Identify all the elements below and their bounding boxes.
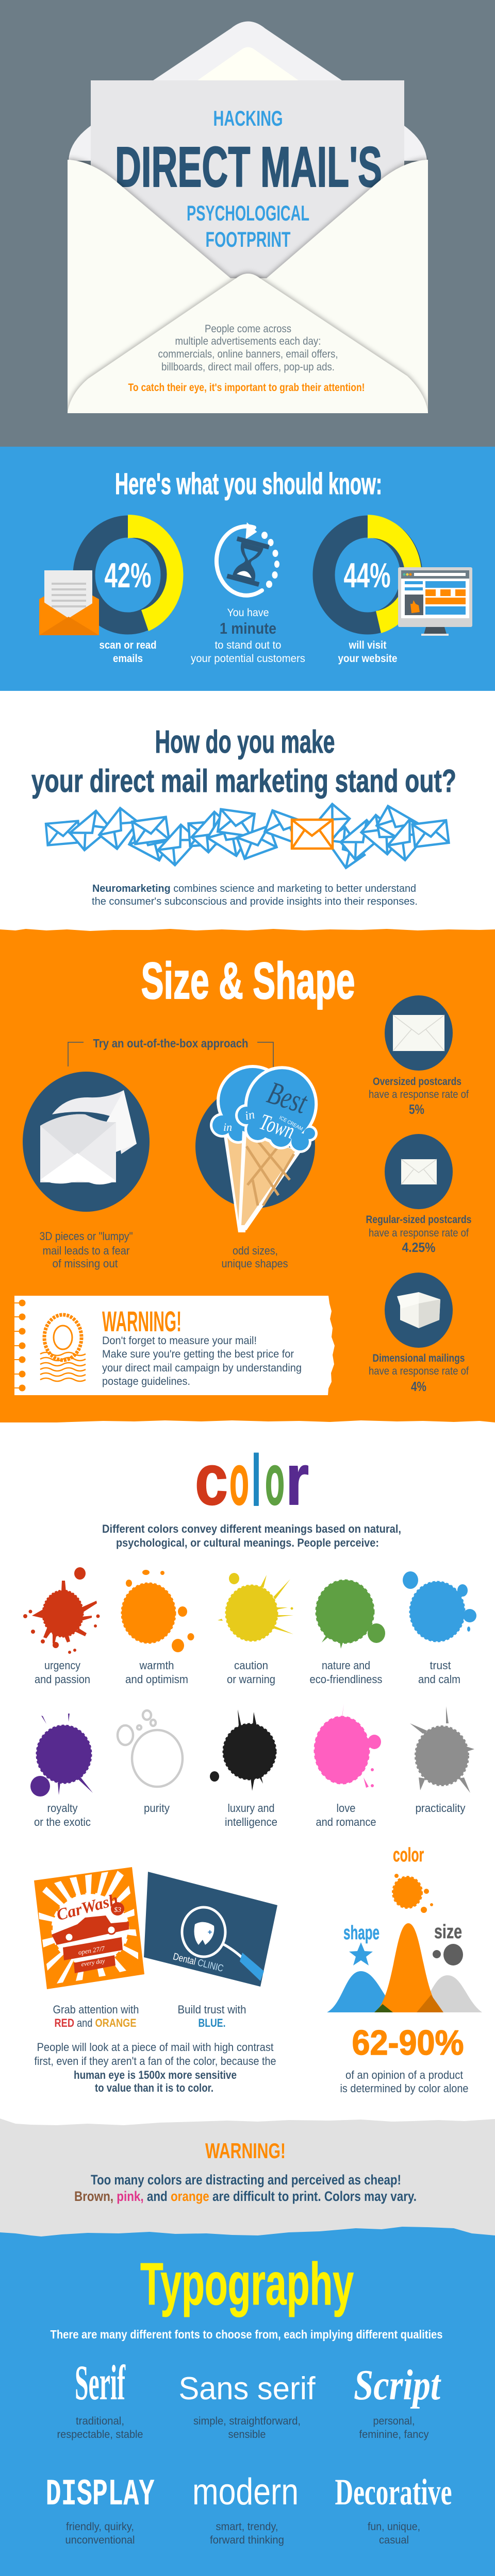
stat: 62-90 percent: [340, 2023, 468, 2095]
panel: stand out: [31, 724, 456, 907]
label: love: and romance: [316, 1816, 376, 1828]
label: scan or read emails: scan or read: [99, 639, 157, 651]
heading: How do you make: [155, 724, 335, 760]
label: warmth: [125, 1659, 188, 1686]
callout: measure your mail warning: Don't forget to measure your mail!: [102, 1335, 257, 1347]
label: odd sizes: unique shapes: [222, 1257, 288, 1270]
bracket and approach label: [68, 1037, 273, 1067]
heading: c: [195, 1439, 228, 1520]
font sample: serif: Serif: [75, 2355, 126, 2410]
label: scan or read emails: [99, 639, 157, 665]
label: warmth: warmth: [139, 1659, 174, 1672]
car wash mailer: $3: [114, 1906, 121, 1914]
font sample: script: personal,: [373, 2415, 415, 2427]
text: grab attention: [53, 2003, 139, 2029]
stat: 62-90 percent: is determined by color alone: [340, 2082, 468, 2095]
label: will visit your website: [338, 639, 397, 665]
heading: l: [252, 1440, 261, 1521]
back cone: B: [244, 1091, 259, 1118]
donut: 42 percent: 42%: [104, 556, 152, 595]
label: odd sizes: odd sizes,: [233, 1244, 278, 1257]
intro text: [102, 1522, 401, 1549]
panel: what you should know: [39, 467, 472, 665]
callout: measure your mail warning: postage guidelines.: [102, 1376, 190, 1387]
title: PSYCHOLOGICAL: [187, 201, 309, 225]
star: [349, 1942, 373, 1965]
label: caution: caution: [234, 1659, 268, 1672]
heading: o: [265, 1439, 285, 1520]
text: oversized postcards rate: [369, 1076, 469, 1117]
neuromarketing text: [92, 883, 418, 907]
panel: color: [23, 1439, 482, 2095]
font sample: serif: traditional,: [76, 2415, 124, 2427]
intro text: multiple advertisements each day:: [175, 335, 321, 347]
callout: measure your mail warning: your direct mail campaign by understanding: [102, 1362, 302, 1374]
envelope back flap: [69, 22, 427, 161]
splat: red: [23, 1567, 100, 1654]
heading: r: [286, 1439, 309, 1520]
oval: ice cream cone mailer: [195, 1059, 325, 1232]
bell curve chart: color: [393, 1844, 424, 1866]
neuromarketing text: the consumer's subconscious and provide insights into their responses.: [92, 896, 418, 907]
text: contrast: to value than it is to color.: [95, 2081, 213, 2094]
label: urgency: urgency: [44, 1659, 80, 1672]
text: contrast: [34, 2041, 276, 2094]
font sample: modern: modern: [192, 2471, 299, 2513]
car wash mailer: CarWash: [55, 1890, 120, 1924]
label: practicality: practicality: [416, 1802, 465, 1815]
dental clinic mailer: [144, 1872, 277, 1987]
icon: hourglass timer: [217, 524, 279, 596]
label: love: love: [336, 1802, 356, 1815]
font sample: sans serif: sensible: [228, 2429, 266, 2441]
label: warmth: and optimism: [125, 1673, 188, 1686]
text: contrast: human eye is 1500x more sensitive: [74, 2069, 237, 2081]
envelope front: [68, 160, 428, 413]
one minute text: You have: [227, 607, 269, 619]
font sample: sans serif: simple, straightforward,: [193, 2415, 301, 2427]
font sample: script: [354, 2361, 441, 2441]
bell curve chart: shape: [343, 1922, 380, 1944]
label: urgency: and passion: [35, 1673, 90, 1686]
text: contrast: People will look at a piece of mail with high contrast: [37, 2041, 273, 2054]
text: contrast: first, even if they aren't a fan of the color, because the: [34, 2055, 276, 2067]
label: will visit your website: your website: [338, 653, 397, 665]
font sample: sans serif: [178, 2371, 316, 2441]
label: urgency: [35, 1659, 90, 1686]
font sample: display: DISPLAY: [45, 2473, 155, 2516]
one minute text: your potential customers: [191, 653, 305, 665]
label: 3D pieces: 3D pieces or "lumpy": [39, 1230, 133, 1243]
text: grab attention: Grab attention with: [53, 2003, 139, 2016]
front cone: ICE CREAM: [278, 1115, 304, 1132]
splat: white outline: [118, 1710, 183, 1787]
envelope strip: [46, 804, 449, 868]
label: scan or read emails: emails: [113, 653, 143, 665]
text: build trust: [177, 2003, 246, 2029]
intro text: billboards, direct mail offers, pop-up ads.: [161, 361, 335, 373]
text: dimensional mailings rate: Dimensional mailings: [372, 1352, 465, 1364]
font sample: script: Script: [354, 2361, 441, 2409]
intro text: commercials, online banners, email offers,: [158, 348, 338, 360]
icon: orange envelope with letter: [39, 570, 99, 635]
font sample: serif: respectable, stable: [57, 2429, 143, 2441]
label: luxury: luxury and: [228, 1802, 274, 1815]
text: regular postcards rate: Regular-sized postcards: [366, 1214, 471, 1226]
car wash mailer: [34, 1867, 144, 1989]
intro text: [128, 323, 365, 394]
text: dimensional mailings rate: have a response rate of: [369, 1365, 469, 1377]
car wash mailer: open 27/7: [78, 1944, 105, 1956]
label: trust: [418, 1659, 460, 1686]
heading: o: [229, 1439, 249, 1520]
title: FOOTPRINT: [205, 227, 291, 251]
heading: Typography: [140, 2250, 354, 2317]
label: royalty: or the exotic: [34, 1816, 91, 1828]
label: nature: nature and: [322, 1659, 370, 1672]
text: oversized postcards rate: Oversized postcards: [373, 1076, 461, 1088]
label: nature: [309, 1659, 383, 1686]
front cone: in: [244, 1108, 256, 1123]
text: dimensional mailings rate: 4%: [411, 1379, 426, 1394]
text: build trust: BLUE.: [198, 2016, 226, 2029]
panel: typography: [45, 2250, 452, 2576]
callout: color warning: [74, 2139, 417, 2204]
letter sheet: [91, 80, 404, 286]
dental clinic mailer: Dental CLINIC: [172, 1951, 224, 1974]
label: nature: eco-friendliness: [309, 1673, 383, 1686]
text: oversized postcards rate: have a response rate of: [369, 1089, 469, 1100]
text: regular postcards rate: [366, 1214, 471, 1255]
font sample: decorative: [335, 2471, 452, 2546]
label: caution: or warning: [227, 1673, 275, 1686]
back cone: [210, 1065, 289, 1232]
text: dimensional mailings rate: [369, 1352, 469, 1394]
label: 3D pieces: of missing out: [53, 1257, 118, 1270]
splat: gray: [410, 1706, 474, 1793]
stat: 62-90 percent: 62-90%: [352, 2023, 464, 2062]
icon: postage stamp: [40, 1315, 86, 1381]
intro text: People come across: [205, 323, 291, 335]
callout: color warning: WARNING!: [205, 2139, 286, 2163]
splat: pink: [315, 1704, 381, 1788]
bracket and approach label: Try an out-of-the-box approach: [93, 1037, 249, 1050]
heading: Size & Shape: [141, 952, 355, 1010]
oval: dimensional mailings: [385, 1273, 453, 1348]
splat: [393, 1874, 433, 1913]
font sample: modern: smart, trendy,: [216, 2521, 278, 2533]
text: build trust: Build trust with: [177, 2003, 246, 2016]
oval: lumpy mail: [23, 1072, 150, 1212]
splat: orange: [122, 1570, 194, 1652]
front cone: [235, 1059, 325, 1230]
heading: [31, 724, 456, 799]
donut: 42 percent: [84, 515, 184, 631]
title: HACKING: [213, 106, 283, 130]
back cone: in: [223, 1121, 232, 1133]
intro text: To catch their eye, it's important to grab their attention!: [128, 382, 365, 394]
label: trust: trust: [430, 1659, 451, 1672]
callout: measure your mail warning: WARNING!: [102, 1305, 182, 1337]
intro text: Different colors convey different meanings based on natural,: [102, 1522, 401, 1535]
bell curve chart: size: [434, 1921, 462, 1943]
oval: regular postcards: [385, 1134, 453, 1209]
font sample: display: [45, 2473, 155, 2546]
font sample: decorative: casual: [379, 2534, 409, 2546]
text: regular postcards rate: 4.25%: [402, 1240, 435, 1255]
title: [115, 106, 382, 251]
text: regular postcards rate: have a response rate of: [369, 1227, 469, 1239]
label: 3D pieces: [39, 1230, 133, 1270]
one minute text: 1 minute: [220, 619, 276, 637]
label: purity: purity: [144, 1802, 170, 1815]
font sample: serif: [57, 2355, 143, 2441]
intro text: psychological, or cultural meanings. People perceive:: [116, 1536, 379, 1549]
icon: website on monitor: [398, 567, 472, 636]
label: caution: [227, 1659, 275, 1686]
label: luxury: intelligence: [225, 1816, 277, 1828]
one minute text: to stand out to: [214, 639, 282, 651]
front cone: Town: [257, 1109, 298, 1144]
splat: blue: [403, 1571, 476, 1641]
envelope bottom flap: [68, 274, 428, 413]
splat: green: [316, 1580, 385, 1649]
callout: color warning: Brown, pink, and orange are difficult to print. Colors may vary.: [74, 2189, 417, 2204]
font sample: modern: forward thinking: [210, 2534, 284, 2546]
one minute text: [191, 607, 305, 665]
oval: oversized postcards: [385, 995, 453, 1071]
heading: [195, 1439, 309, 1521]
neuromarketing text: Neuromarketing combines science and marketing to better understand: [92, 883, 416, 894]
callout: measure your mail warning: Make sure you're getting the best price for: [102, 1348, 294, 1360]
label: trust: and calm: [418, 1673, 460, 1686]
label: royalty: royalty: [47, 1802, 77, 1815]
splat: purple: [30, 1714, 93, 1797]
splat: black: [210, 1709, 276, 1791]
text: oversized postcards rate: 5%: [409, 1101, 424, 1117]
label: 3D pieces: mail leads to a fear: [42, 1244, 130, 1257]
label: luxury: [225, 1802, 277, 1828]
callout: color warning: Too many colors are distracting and perceived as cheap!: [91, 2172, 401, 2188]
donut: 44 percent: 44%: [343, 556, 391, 595]
dental clinic mailer: +: [208, 1928, 212, 1937]
stat: 62-90 percent: of an opinion of a product: [345, 2069, 463, 2081]
font sample: modern: [192, 2471, 299, 2546]
label: love: [316, 1802, 376, 1828]
text: grab attention: RED and ORANGE: [55, 2016, 136, 2029]
notebook holes: [14, 1299, 26, 1391]
font sample: display: friendly, quirky,: [66, 2521, 134, 2533]
panel: size and shape: [14, 952, 471, 1395]
font sample: display: unconventional: [65, 2534, 135, 2546]
car wash mailer: every day: [80, 1957, 106, 1968]
label: odd sizes: [222, 1244, 288, 1270]
intro text: There are many different fonts to choose from, each implying different qualities: [51, 2328, 442, 2341]
font sample: sans serif: Sans serif: [178, 2371, 316, 2406]
label: will visit your website: will visit: [349, 639, 387, 651]
splat: yellow: [218, 1573, 293, 1641]
font sample: decorative: fun, unique,: [368, 2521, 420, 2533]
front cone: Best: [263, 1075, 312, 1121]
callout: measure your mail warning: [14, 1296, 335, 1395]
font sample: script: feminine, fancy: [359, 2429, 429, 2441]
bell curve chart: [327, 1844, 482, 2012]
donut: 44 percent: [324, 515, 422, 633]
hero envelope: [68, 22, 428, 413]
label: royalty: [34, 1802, 91, 1828]
